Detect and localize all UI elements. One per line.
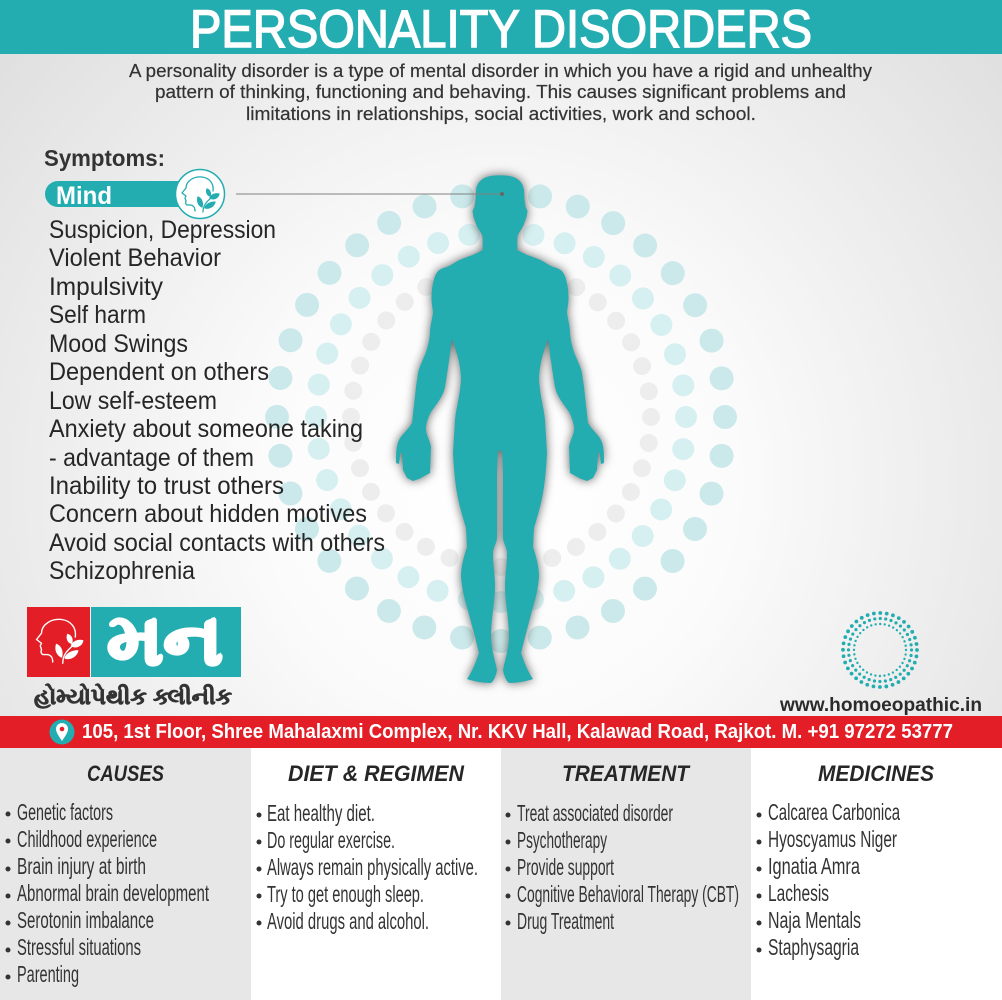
symptoms list: Dependent on others (49, 358, 269, 386)
symptoms list: Concern about hidden motives (49, 500, 367, 528)
website: www.homoeopathic.in (779, 695, 982, 716)
panel: causes: Abnormal brain development (17, 880, 209, 906)
panel: diet and regimen: Avoid drugs and alcohol. (267, 908, 429, 934)
panel: medicines: Hyoscyamus Niger (768, 826, 897, 852)
symptoms list: Low self-esteem (49, 387, 217, 415)
panel: causes: Parenting (17, 961, 79, 987)
symptoms heading: Symptoms: (44, 145, 165, 171)
panel: diet and regimen: DIET & REGIMEN (288, 761, 465, 786)
panel: treatment: Drug Treatment (517, 908, 614, 934)
panel: medicines (751, 748, 1002, 1000)
panel: causes: Brain injury at birth (17, 853, 146, 879)
symptoms list: Impulsivity (49, 273, 163, 301)
symptoms list: - advantage of them (49, 444, 254, 472)
panel: treatment: Treat associated disorder (517, 800, 673, 826)
symptoms list (49, 216, 385, 585)
background (0, 0, 1002, 720)
clinic logo (27, 600, 241, 709)
intro text: pattern of thinking, functioning and behaving. This causes significant problems and (155, 81, 846, 102)
ring logo (843, 613, 917, 687)
symptoms list: Suspicion, Depression (49, 216, 276, 244)
panel: diet and regimen (251, 748, 501, 1000)
symptoms list: Inability to trust others (49, 472, 284, 500)
clinic logo: હોમ્યોપેથીક ક્લીનીક (34, 683, 232, 709)
mind pill with head icon: Mind (56, 182, 112, 210)
intro text: limitations in relationships, social activities, work and school. (246, 103, 756, 124)
mind pill with head icon (45, 170, 224, 218)
address bar (0, 716, 1002, 748)
symptoms list: Schizophrenia (49, 557, 195, 585)
header banner with title: PERSONALITY DISORDERS (190, 0, 812, 59)
panel: causes: Genetic factors (17, 799, 113, 825)
panel: medicines: Staphysagria (768, 934, 859, 960)
panel: treatment: TREATMENT (562, 761, 691, 786)
header banner with title (0, 0, 1002, 59)
panel: treatment (501, 748, 751, 1000)
human body silhouette (396, 175, 604, 683)
clinic logo: મન (107, 600, 223, 680)
symptoms list: Mood Swings (49, 330, 188, 358)
panel: medicines: Calcarea Carbonica (768, 799, 900, 825)
panel: treatment: Cognitive Behavioral Therapy (CBT) (517, 881, 739, 907)
panel: causes: Serotonin imbalance (17, 907, 154, 933)
symptoms list: Anxiety about someone taking (49, 415, 363, 443)
panel: diet and regimen: Do regular exercise. (267, 827, 395, 853)
panel: causes: CAUSES (87, 761, 164, 786)
panel: treatment: Psychotherapy (517, 827, 607, 853)
panel: diet and regimen: Eat healthy diet. (267, 800, 375, 826)
intro text: A personality disorder is a type of mental disorder in which you have a rigid and unhealthy (129, 60, 873, 81)
panel: medicines: Lachesis (768, 880, 829, 906)
symptoms list: Self harm (49, 301, 146, 329)
concentric dot rings (277, 193, 725, 641)
panel: medicines: Naja Mentals (768, 907, 861, 933)
panel: treatment: Provide support (517, 854, 614, 880)
intro text (129, 60, 873, 124)
panel: causes: Stressful situations (17, 934, 141, 960)
panel: diet and regimen: Always remain physically active. (267, 854, 478, 880)
leader line to head (236, 192, 504, 196)
panel: diet and regimen: Try to get enough sleep. (267, 881, 424, 907)
panel: medicines: Ignatia Amra (768, 853, 860, 879)
symptoms list: Avoid social contacts with others (49, 529, 385, 557)
panel: medicines: MEDICINES (818, 761, 934, 786)
symptoms list: Violent Behavior (49, 244, 221, 272)
panel: causes (0, 748, 251, 1000)
panel: causes: Childhood experience (17, 826, 157, 852)
